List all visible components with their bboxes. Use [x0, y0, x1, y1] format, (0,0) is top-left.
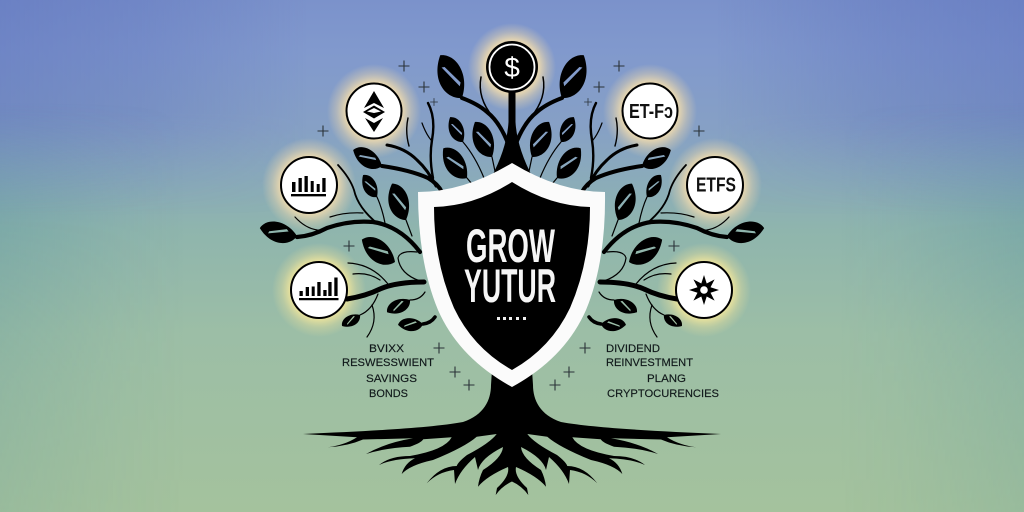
- icon: bar chart lower: [291, 262, 347, 318]
- left label list: BONDS: [369, 388, 408, 400]
- tree right half: branches, leaves, roots: [511, 50, 766, 495]
- icon: ETFS circle: [687, 157, 743, 213]
- icon: dollar coin: [486, 41, 538, 93]
- right label list: CRYPTOCURENCIES: [607, 388, 719, 400]
- upper branches: [295, 77, 509, 252]
- icon: ET-F circle: ET-Fɔ: [629, 101, 673, 123]
- lower branches: [347, 252, 435, 337]
- left label list: RESWESSWIENT: [342, 357, 434, 369]
- tree left half: branches, leaves, roots: [258, 50, 513, 495]
- shield title: YUTUR: [464, 259, 556, 312]
- shield title: [464, 219, 556, 312]
- left label list: BVIXX: [369, 343, 405, 355]
- right label list: DIVIDEND: [606, 343, 660, 355]
- left label list: SAVINGS: [366, 373, 417, 385]
- right label list: REINVESTMENT: [606, 357, 693, 369]
- icon: bar chart upper: [281, 157, 337, 213]
- trunk and crown stem: [491, 90, 513, 185]
- left label list: [342, 343, 434, 400]
- icon: ethereum diamond: [346, 84, 402, 138]
- icon: ETFS circle: ETFS: [696, 174, 736, 196]
- icon: star gear: [676, 262, 732, 318]
- shield dots: [497, 317, 526, 320]
- shield: [418, 163, 605, 387]
- right label list: PLANG: [647, 373, 686, 385]
- shield title: GROW: [466, 219, 555, 272]
- leaves: [429, 50, 473, 104]
- icon: dollar coin: $: [504, 52, 520, 83]
- glows behind icon circles: [262, 23, 762, 337]
- sparkle plus marks: [318, 60, 704, 390]
- right label list: [606, 343, 719, 400]
- trunk base and roots: [303, 360, 513, 495]
- icon: ET-F circle: [622, 84, 678, 138]
